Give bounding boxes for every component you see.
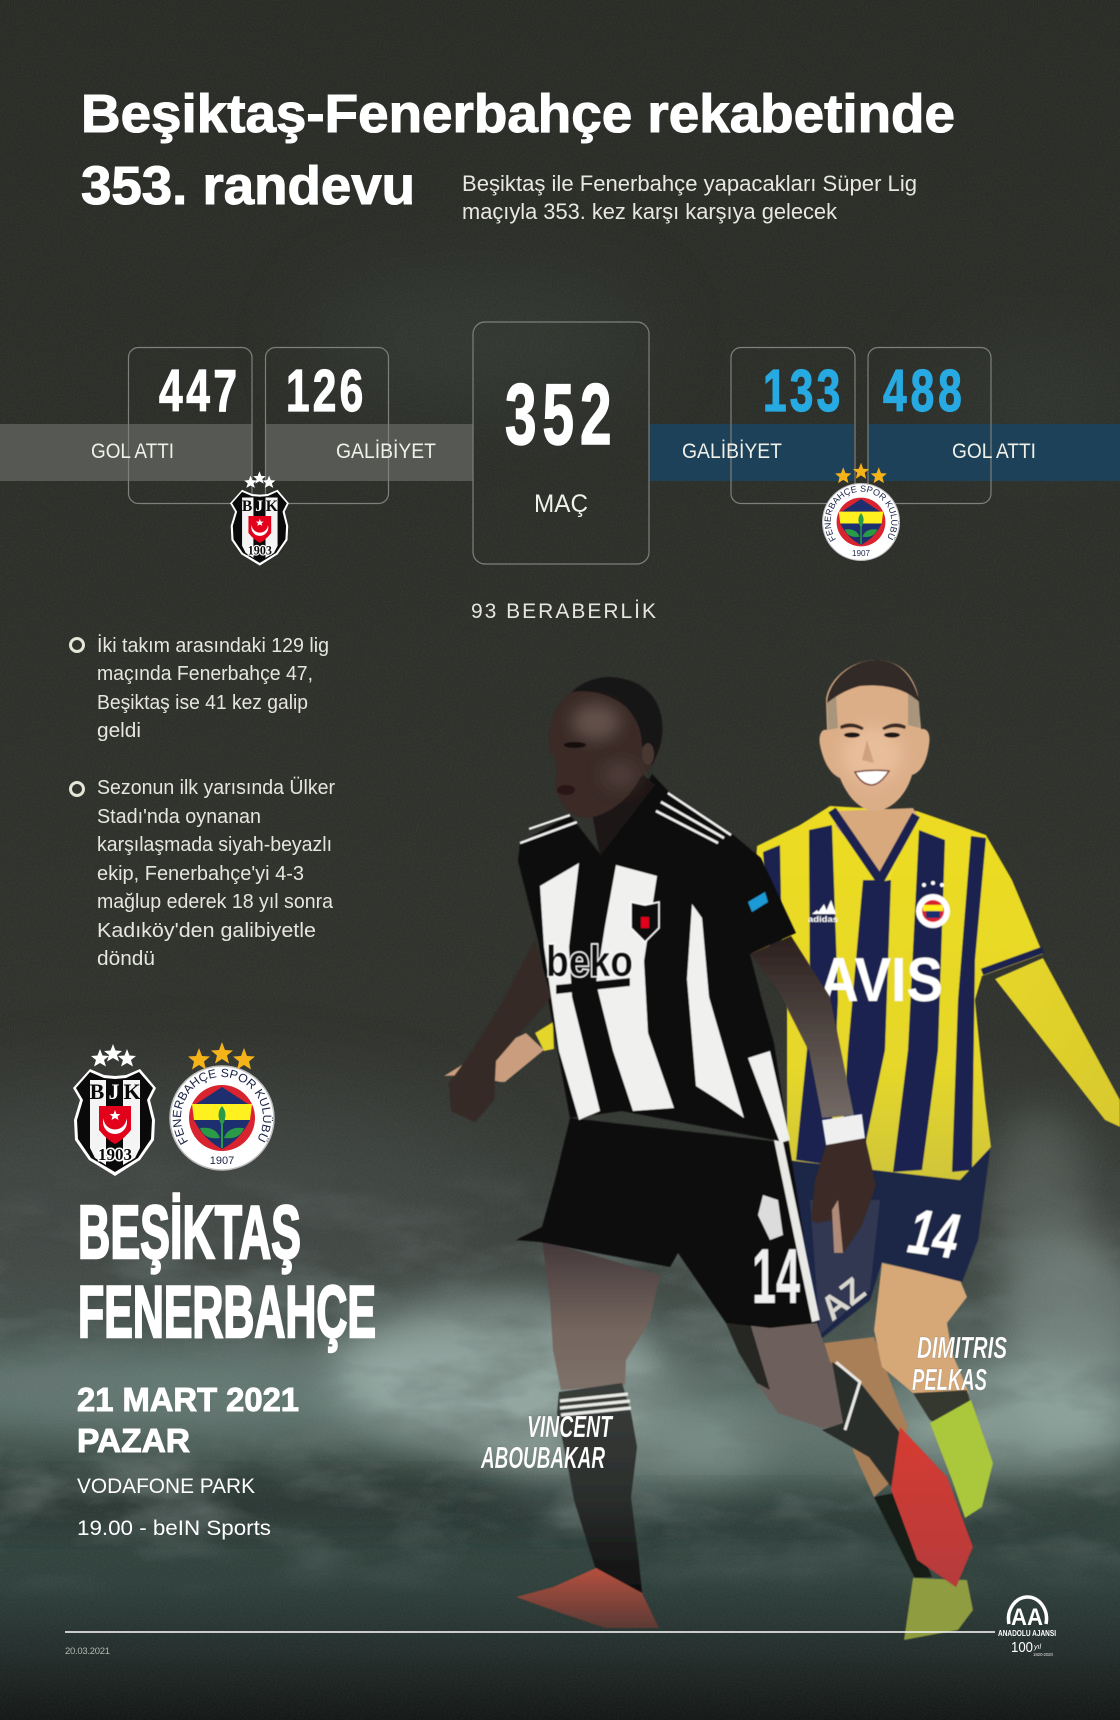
text block: bullet one: İki takım arasındaki 129 lig xyxy=(97,634,329,657)
text block: bullet two: Sezonun ilk yarısında Ülker xyxy=(97,777,335,799)
icon: large Beşiktaş crest: B xyxy=(90,1079,105,1104)
subtitle: Beşiktaş ile Fenerbahçe yapacakları Süper Lig xyxy=(462,171,917,196)
icon: small Fenerbahçe crest: FENERBAHÇE SPOR KULÜBÜ xyxy=(824,486,899,542)
icon: small Beşiktaş crest: K xyxy=(266,498,279,515)
icon: small Beşiktaş crest: J xyxy=(255,498,263,515)
footer date: 20.03.2021 xyxy=(65,1646,110,1657)
far boot xyxy=(904,1578,973,1640)
icon: large Fenerbahçe crest: 1907 xyxy=(210,1155,234,1167)
icon: small Beşiktaş crest xyxy=(230,471,289,566)
panel: Fenerbahçe wins xyxy=(682,348,855,504)
shirt badge xyxy=(916,894,950,928)
text block: bullet one: maçında Fenerbahçe 47, xyxy=(97,663,313,685)
panel: Beşiktaş goals: GOL ATTI xyxy=(91,440,174,463)
icon: Anadolu Ajansı logo: 100 xyxy=(1011,1639,1033,1656)
text block: bullet two: Kadıköy'den galibiyetle xyxy=(97,920,316,942)
panel: Beşiktaş wins: GALİBİYET xyxy=(336,440,436,463)
text block: match info xyxy=(77,1381,299,1540)
player name: Vincent Aboubakar: VINCENT xyxy=(527,1409,614,1444)
wristband xyxy=(822,1114,865,1145)
icon: large Beşiktaş crest: K xyxy=(123,1079,141,1104)
panel: Beşiktaş goals xyxy=(91,348,252,504)
panel: Fenerbahçe goals: 488 xyxy=(883,357,966,424)
icon: large Beşiktaş crest: 1903 xyxy=(98,1145,132,1164)
sleeve logo xyxy=(748,892,768,912)
head xyxy=(549,677,662,818)
icon: Anadolu Ajansı logo: ANADOLU AJANSI xyxy=(998,1628,1056,1638)
panel: Fenerbahçe wins: GALİBİYET xyxy=(682,440,782,463)
left sock xyxy=(557,1383,642,1593)
title: Beşiktaş-Fenerbahçe rekabetinde xyxy=(81,84,955,144)
text block: bullet two: ekip, Fenerbahçe'yi 4-3 xyxy=(97,863,304,885)
draws label: 93 BERABERLİK xyxy=(471,600,656,623)
title xyxy=(81,84,955,216)
panel: Beşiktaş wins xyxy=(266,348,436,504)
player name: Vincent Aboubakar xyxy=(480,1409,614,1475)
panel: Fenerbahçe goals: GOL ATTI xyxy=(952,440,1036,463)
icon: Anadolu Ajansı logo: AA xyxy=(1011,1604,1043,1631)
panel: Beşiktaş goals: 447 xyxy=(159,357,241,424)
text block: bullet two: karşılaşmada siyah-beyazlı xyxy=(97,834,332,856)
player name: Dimitris Pelkas xyxy=(912,1330,1007,1397)
player: Dimitris Pelkas xyxy=(750,660,1120,1640)
text block: bullet one: geldi xyxy=(97,720,141,742)
icon: small Fenerbahçe crest xyxy=(822,463,900,561)
icon: large Fenerbahçe crest xyxy=(169,1042,275,1171)
text block: bullet two: mağlup ederek 18 yıl sonra xyxy=(97,891,334,913)
text block: match info: PAZAR xyxy=(77,1422,190,1459)
heading: team names: BEŞİKTAŞ xyxy=(78,1190,301,1274)
title: 353. randevu xyxy=(81,156,415,216)
icon: Anadolu Ajansı logo: 1920-2020 xyxy=(1033,1652,1053,1657)
subtitle: maçıyla 353. kez karşı karşıya gelecek xyxy=(462,199,838,224)
shirt panels xyxy=(540,863,790,1143)
icon: small Beşiktaş crest: B xyxy=(242,498,252,515)
shirt badge xyxy=(631,902,659,942)
shorts xyxy=(787,1150,990,1342)
player: Vincent Aboubakar xyxy=(444,677,973,1628)
text block: bullet two: Stadı'nda oynanan xyxy=(97,806,261,828)
panel: Fenerbahçe goals xyxy=(868,348,1036,504)
right arm xyxy=(750,936,854,1118)
panel: Fenerbahçe wins: 133 xyxy=(763,357,843,424)
icon: small Beşiktaş crest: 1903 xyxy=(248,543,272,557)
shirt xyxy=(750,806,1043,1180)
right sock xyxy=(822,1362,923,1492)
text block: match info: 19.00 - beIN Sports xyxy=(77,1517,271,1540)
text block: match info: VODAFONE PARK xyxy=(77,1475,255,1498)
near leg xyxy=(874,1263,969,1393)
player: Dimitris Pelkas: 14 xyxy=(904,1195,964,1273)
near boot xyxy=(930,1400,993,1518)
player name: Dimitris Pelkas: PELKAS xyxy=(912,1362,987,1397)
icon: large Beşiktaş crest xyxy=(73,1044,156,1176)
panel: total matches: 352 xyxy=(505,367,618,463)
jersey sponsor: beko xyxy=(546,937,633,986)
text block: bullet two xyxy=(70,777,335,970)
text block: match info: 21 MART 2021 xyxy=(77,1381,299,1418)
subtitle xyxy=(462,171,917,224)
text block: bullet one xyxy=(70,634,329,742)
heading: team names: FENERBAHÇE xyxy=(78,1272,376,1353)
player: Vincent Aboubakar: 14 xyxy=(752,1232,800,1320)
icon: Anadolu Ajansı logo: yıl xyxy=(1033,1644,1041,1651)
panel: total matches xyxy=(473,322,649,564)
far hand of other player xyxy=(444,1033,544,1082)
right leg xyxy=(726,1323,856,1428)
stat bars xyxy=(0,424,1120,481)
text block: bullet one: Beşiktaş ise 41 kez galip xyxy=(97,692,308,714)
text block: bullet two: döndü xyxy=(97,948,155,970)
icon: large Beşiktaş crest: J xyxy=(108,1079,120,1104)
player: Dimitris Pelkas: AZ xyxy=(814,1270,873,1328)
icon: Anadolu Ajansı logo xyxy=(998,1597,1056,1657)
adidas mark xyxy=(812,900,836,914)
panel: total matches: MAÇ xyxy=(534,490,588,518)
left shoe xyxy=(516,1568,659,1628)
icon: large Fenerbahçe crest: FENERBAHÇE SPOR KULÜBÜ xyxy=(172,1068,274,1145)
icon: small Fenerbahçe crest: 1907 xyxy=(852,549,871,558)
footer rule xyxy=(65,1631,995,1633)
jersey sponsor: AVIS xyxy=(819,946,943,1015)
player: Dimitris Pelkas: adidas xyxy=(808,915,839,924)
shirt xyxy=(518,774,796,1143)
shirt stripes xyxy=(763,825,986,1172)
far leg xyxy=(824,1337,908,1497)
red boot xyxy=(891,1427,973,1587)
player name: Vincent Aboubakar: ABOUBAKAR xyxy=(480,1440,605,1475)
head xyxy=(819,660,930,811)
shorts xyxy=(516,1118,817,1328)
hand xyxy=(811,1138,876,1253)
left arm xyxy=(449,940,551,1122)
heading: team names xyxy=(78,1190,376,1353)
left leg xyxy=(542,1240,660,1390)
player name: Dimitris Pelkas: DIMITRIS xyxy=(917,1330,1007,1365)
neck xyxy=(592,772,655,856)
neck xyxy=(835,808,919,876)
sleeve xyxy=(995,958,1120,1127)
panel: Beşiktaş wins: 126 xyxy=(286,357,366,424)
